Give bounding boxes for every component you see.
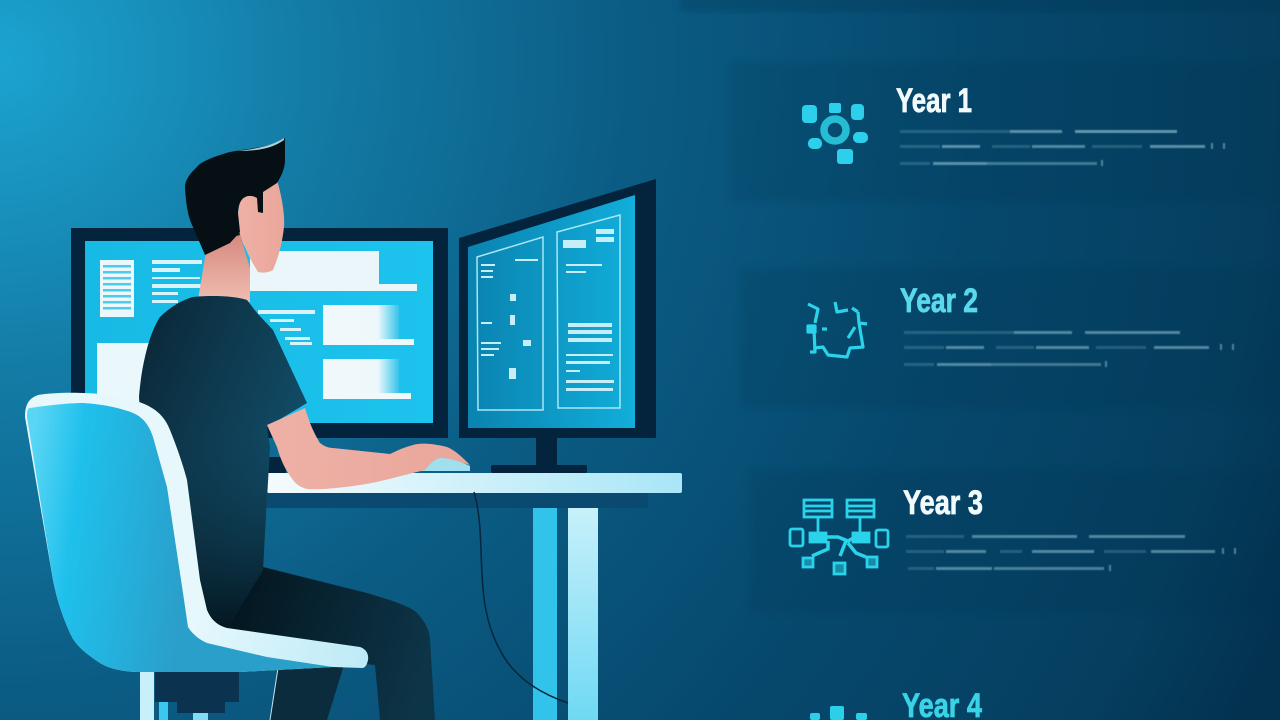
panel: year 2	[740, 268, 1280, 408]
panel: year 3	[750, 470, 1280, 612]
heading: year 1: Year 1	[896, 82, 972, 120]
monitor: right	[459, 179, 656, 473]
panel: top edge band	[680, 0, 1280, 12]
panel: year 4	[810, 687, 982, 720]
torso shading	[150, 430, 270, 640]
chair	[25, 393, 368, 720]
person	[139, 138, 470, 720]
far leg	[270, 665, 344, 720]
hair highlight	[238, 138, 284, 151]
near leg	[200, 560, 435, 720]
stand	[536, 437, 557, 466]
icon: year 4 network	[810, 706, 867, 720]
hair	[185, 138, 285, 255]
chair shell	[25, 393, 368, 672]
icon: year 2 circuit	[808, 302, 867, 357]
neck	[198, 235, 250, 302]
torso	[139, 296, 307, 640]
icon: year 1 hub	[802, 103, 868, 164]
panel: year 1	[730, 62, 1280, 202]
desk	[266, 457, 682, 720]
arm	[267, 408, 470, 489]
heading: year 2: Year 2	[900, 282, 978, 320]
illustration: developer at workstation	[25, 138, 682, 720]
text lines: year 3	[906, 535, 1236, 571]
monitor: left	[71, 228, 448, 438]
keyboard	[420, 456, 470, 471]
icon: year 3 network	[790, 500, 888, 574]
chair seat	[27, 403, 333, 672]
text lines: year 1	[900, 130, 1225, 166]
heading: year 3: Year 3	[903, 484, 983, 522]
text lines: year 2	[904, 331, 1234, 367]
face	[238, 180, 284, 273]
